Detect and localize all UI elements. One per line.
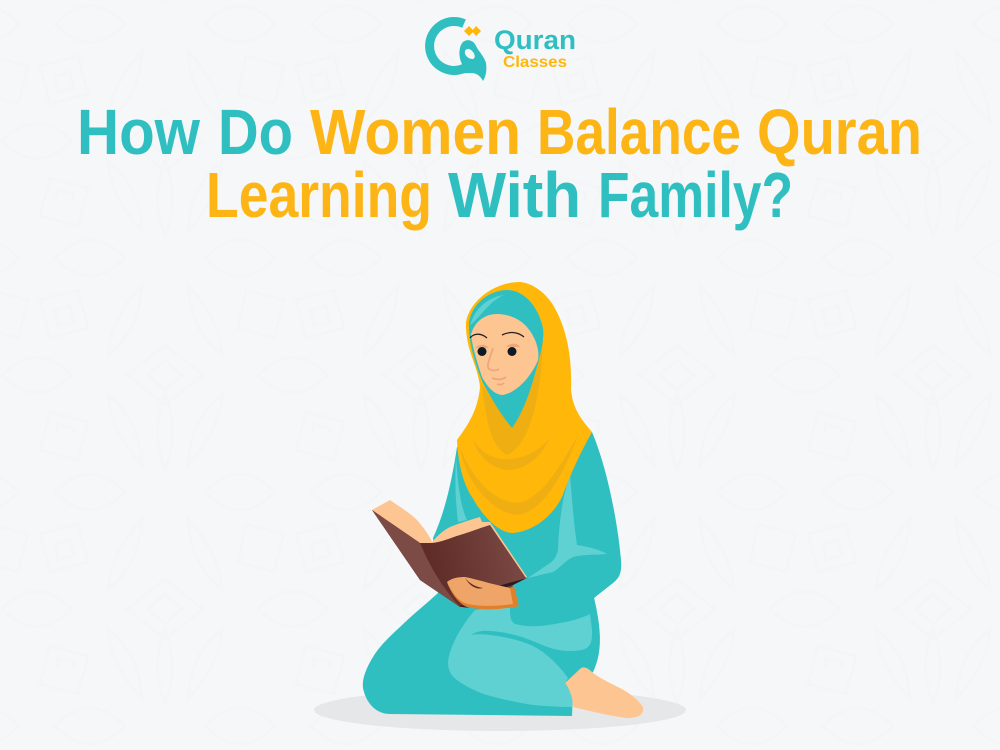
title line 1: Do bbox=[218, 96, 293, 168]
dress sleeve highlight bbox=[528, 475, 607, 578]
dress body bbox=[363, 432, 621, 716]
logo word Classes: Classes bbox=[503, 54, 567, 71]
logo: Quran Classes bbox=[430, 22, 576, 81]
floor shadow bbox=[314, 689, 686, 731]
inner scarf bbox=[469, 290, 543, 428]
book bottom shadow bbox=[450, 578, 527, 608]
book cover bbox=[372, 510, 526, 607]
book notch between fingers bbox=[465, 578, 483, 589]
sleeve cuff bbox=[447, 582, 519, 609]
scarf highlight bbox=[470, 295, 504, 325]
title line 1: Quran bbox=[757, 96, 922, 168]
title line 2: Family? bbox=[598, 159, 793, 231]
icon: logo dots bbox=[464, 26, 481, 36]
logo word Quran: Quran bbox=[494, 25, 576, 55]
title line 2: Learning bbox=[206, 159, 432, 231]
hijab folds bbox=[460, 333, 578, 515]
dress knee highlight bbox=[448, 605, 600, 707]
title line 1: Women bbox=[310, 96, 521, 168]
sleeve edge bbox=[510, 575, 605, 626]
eyes bbox=[475, 344, 520, 356]
illustration: woman reading book bbox=[314, 282, 686, 731]
dress fold bbox=[471, 598, 600, 678]
foot bbox=[565, 667, 643, 718]
title line 1 bbox=[77, 96, 922, 168]
nose and mouth bbox=[488, 348, 506, 385]
title line 1: How bbox=[77, 96, 200, 168]
title line 1: Balance bbox=[537, 96, 741, 168]
title bbox=[77, 96, 922, 231]
hand bbox=[447, 577, 518, 609]
hijab bbox=[457, 282, 592, 533]
dress left highlight bbox=[455, 457, 467, 522]
icon: logo crescent bbox=[430, 22, 486, 81]
eyebrows bbox=[470, 333, 524, 338]
title line 2: With bbox=[448, 159, 581, 231]
face bbox=[471, 314, 538, 395]
book pages bbox=[372, 500, 527, 600]
book left cover bbox=[372, 510, 460, 607]
title line 2 bbox=[206, 159, 793, 231]
